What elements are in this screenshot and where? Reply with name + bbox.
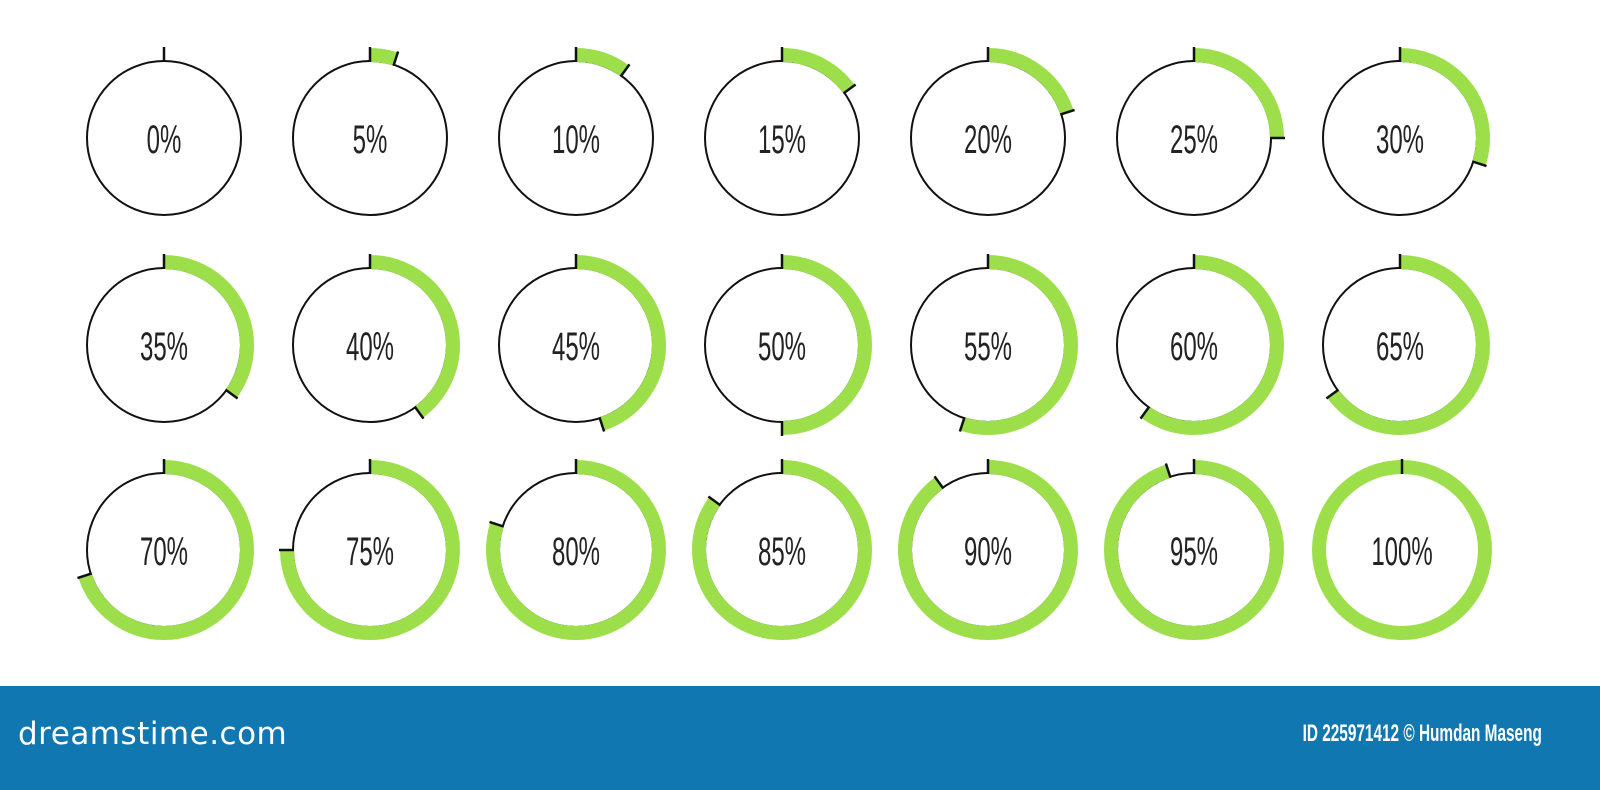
ring 15% (699, 47, 865, 221)
ring 40%: 40% (346, 324, 394, 368)
ring 80%: 80% (552, 529, 600, 573)
ring 70%: 70% (140, 529, 188, 573)
ring 0%: 0% (147, 117, 181, 161)
ring 85% (699, 459, 865, 633)
ring 95%: 95% (1170, 529, 1218, 573)
ring 50% (699, 254, 865, 436)
ring 95% (1111, 459, 1277, 633)
ring 5%: 5% (353, 117, 387, 161)
ring 55% (905, 254, 1071, 432)
ring 45%: 45% (552, 324, 600, 368)
image id credit: ID 225971412 © Humdan Maseng (1303, 720, 1542, 747)
logo text: dreamstime.com (18, 716, 287, 752)
ring 30%: 30% (1376, 117, 1424, 161)
ring 85%: 85% (758, 529, 806, 573)
ring 60%: 60% (1170, 324, 1218, 368)
ring 10% (493, 47, 659, 221)
ring 35%: 35% (140, 324, 188, 368)
ring 10%: 10% (552, 117, 600, 161)
ring 90%: 90% (964, 529, 1012, 573)
ring 65%: 65% (1376, 324, 1424, 368)
ring 20%: 20% (964, 117, 1012, 161)
ring 25% (1111, 47, 1285, 221)
ring 5% (287, 47, 453, 221)
ring 75% (279, 459, 453, 633)
ring 100% (1319, 459, 1485, 633)
ring 90% (905, 459, 1071, 633)
ring 70% (77, 459, 247, 633)
ring 20% (905, 47, 1075, 221)
ring 30% (1317, 47, 1487, 221)
ring 45% (493, 254, 659, 432)
ring 25%: 25% (1170, 117, 1218, 161)
ring 0% (87, 47, 241, 215)
ring 75%: 75% (346, 529, 394, 573)
footer bar (0, 686, 1600, 790)
ring 65% (1317, 254, 1483, 428)
ring 100%: 100% (1371, 529, 1433, 573)
ring 15%: 15% (758, 117, 806, 161)
ring 60% (1111, 254, 1277, 428)
ring 55%: 55% (964, 324, 1012, 368)
ring 35% (81, 254, 247, 428)
ring 50%: 50% (758, 324, 806, 368)
ring 80% (489, 459, 659, 633)
ring 40% (287, 254, 453, 428)
